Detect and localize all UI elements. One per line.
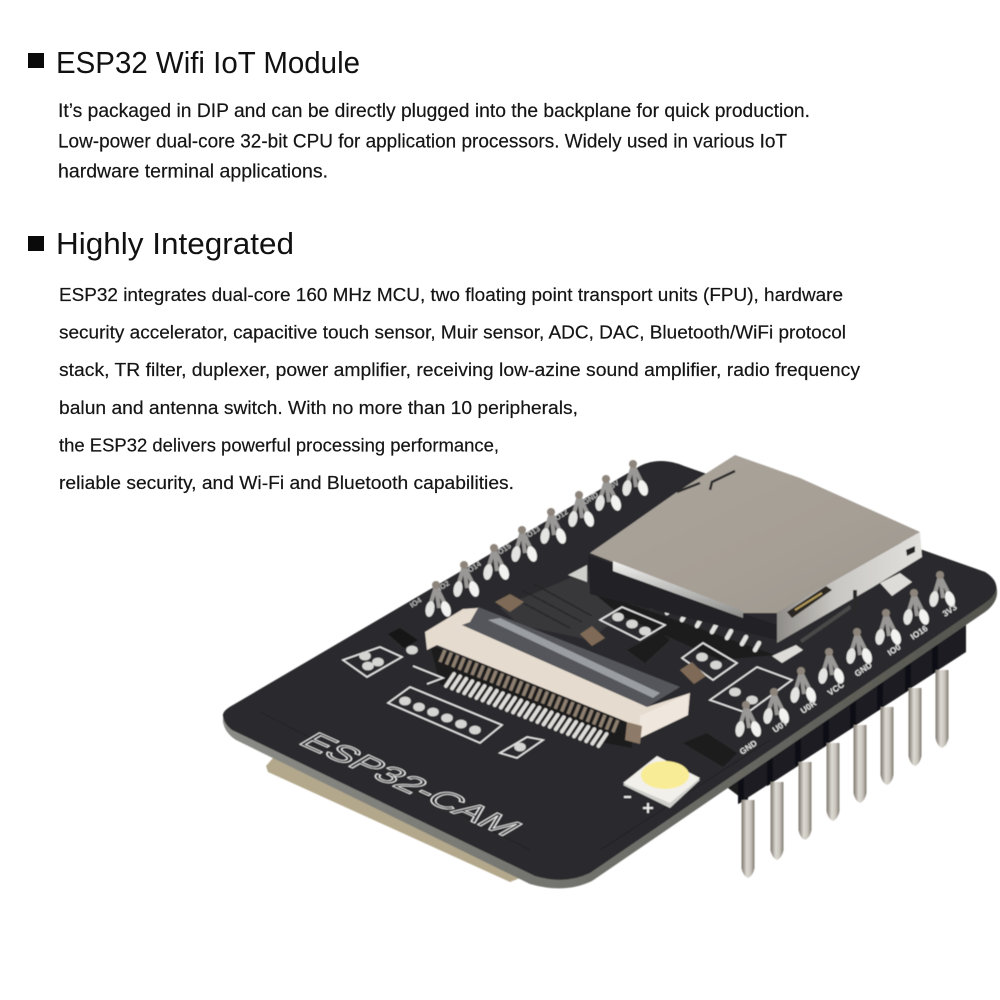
top row silk labels: IO4 [408,595,424,610]
silk arrow mark [413,666,443,684]
footprint left [343,647,402,677]
footprint pill [500,737,543,758]
brown capacitors [495,594,706,684]
intro paragraph: Low-power dual-core 32-bit CPU for application processors. Widely used in various IoT [58,130,787,152]
footprint six pads [388,687,502,743]
description paragraph: balun and antenna switch. With no more than 10 peripherals, [59,397,578,418]
footprint right b [682,643,737,680]
description paragraph: stack, TR filter, duplexer, power amplifier, receiving low-azine sound amplifier, radio frequency [59,359,861,380]
SD shiny front rail [613,561,743,618]
pin silk labels: VCC [826,679,846,698]
connector brown fingers [440,650,618,732]
top row silk labels: IO12 [551,507,570,524]
intro paragraph: hardware terminal applications. [58,160,328,182]
SD silver tabs [880,573,912,596]
pin silk labels: GND [738,738,759,757]
description paragraph [59,284,861,493]
footprint right c [710,667,792,713]
description paragraph: the ESP32 delivers powerful processing performance, [59,434,499,456]
section: ESP32 Wifi IoT Module [28,45,810,182]
top row silk labels: 5V [608,478,621,491]
section: Highly Integrated [28,226,861,493]
SD card opening [787,586,832,618]
product photo: ESP32-CAM board [223,455,997,888]
pin silk labels [738,602,959,757]
pin silk labels: IO16 [909,623,930,642]
FPC camera connector [425,607,690,748]
top row silk labels: GND [581,490,601,507]
connector silver contacts [446,674,606,746]
SD solder fingers [590,590,775,660]
pin silk labels: GND [853,660,874,679]
top row solder pins [424,460,650,618]
heading: ESP32 Wifi IoT Module: ESP32 Wifi IoT Module [56,45,360,80]
top row silk labels: IO13 [523,524,542,541]
top row silk labels: IO2 [436,579,451,593]
PCB top surface [223,461,996,880]
footprint pads [359,613,758,751]
board marking: ESP32-CAM: ESP32-CAM [291,728,531,840]
pin silk labels: U0T [771,717,790,735]
pin silk labels: IO0 [886,642,903,658]
top row silk labels: IO15 [494,541,513,558]
description paragraph: security accelerator, capacitive touch sensor, Muir sensor, ADC, DAC, Bluetooth/WiFi protocol [59,322,846,342]
camera module underside [266,750,520,882]
top row silk labels [408,478,621,610]
PCB edge [223,461,997,888]
SD notch [677,471,735,492]
pin silk labels: 3V3 [941,602,959,619]
silk footprints and parts [343,607,792,758]
bullet square [28,236,44,251]
SD side wall [777,532,922,643]
SD card slot [588,455,922,663]
pin silk labels: U0R [799,698,818,716]
connector gray channel [462,607,680,707]
bullet square [28,53,44,68]
SD top metal cover [590,455,920,613]
SD black front block [588,555,777,640]
connector contacts backing [430,645,632,748]
bottom row solder pins [734,571,957,738]
footprint right a [600,607,665,640]
darker board zones and traces [260,565,770,850]
flash LED [623,756,700,813]
intro paragraph [58,100,810,182]
LED polarity marks [624,797,653,813]
description paragraph: reliable security, and Wi-Fi and Bluetooth capabilities. [59,472,514,493]
top row silk labels: IO14 [464,559,483,576]
connector beige body [425,608,690,738]
description paragraph: ESP32 integrates dual-core 160 MHz MCU, two floating point transport units (FPU), hardware [59,284,843,305]
intro paragraph: It’s packaged in DIP and can be directly plugged into the backplane for quick production. [58,100,810,122]
header pins below board [728,618,966,878]
heading: Highly Integrated: Highly Integrated [56,226,294,261]
